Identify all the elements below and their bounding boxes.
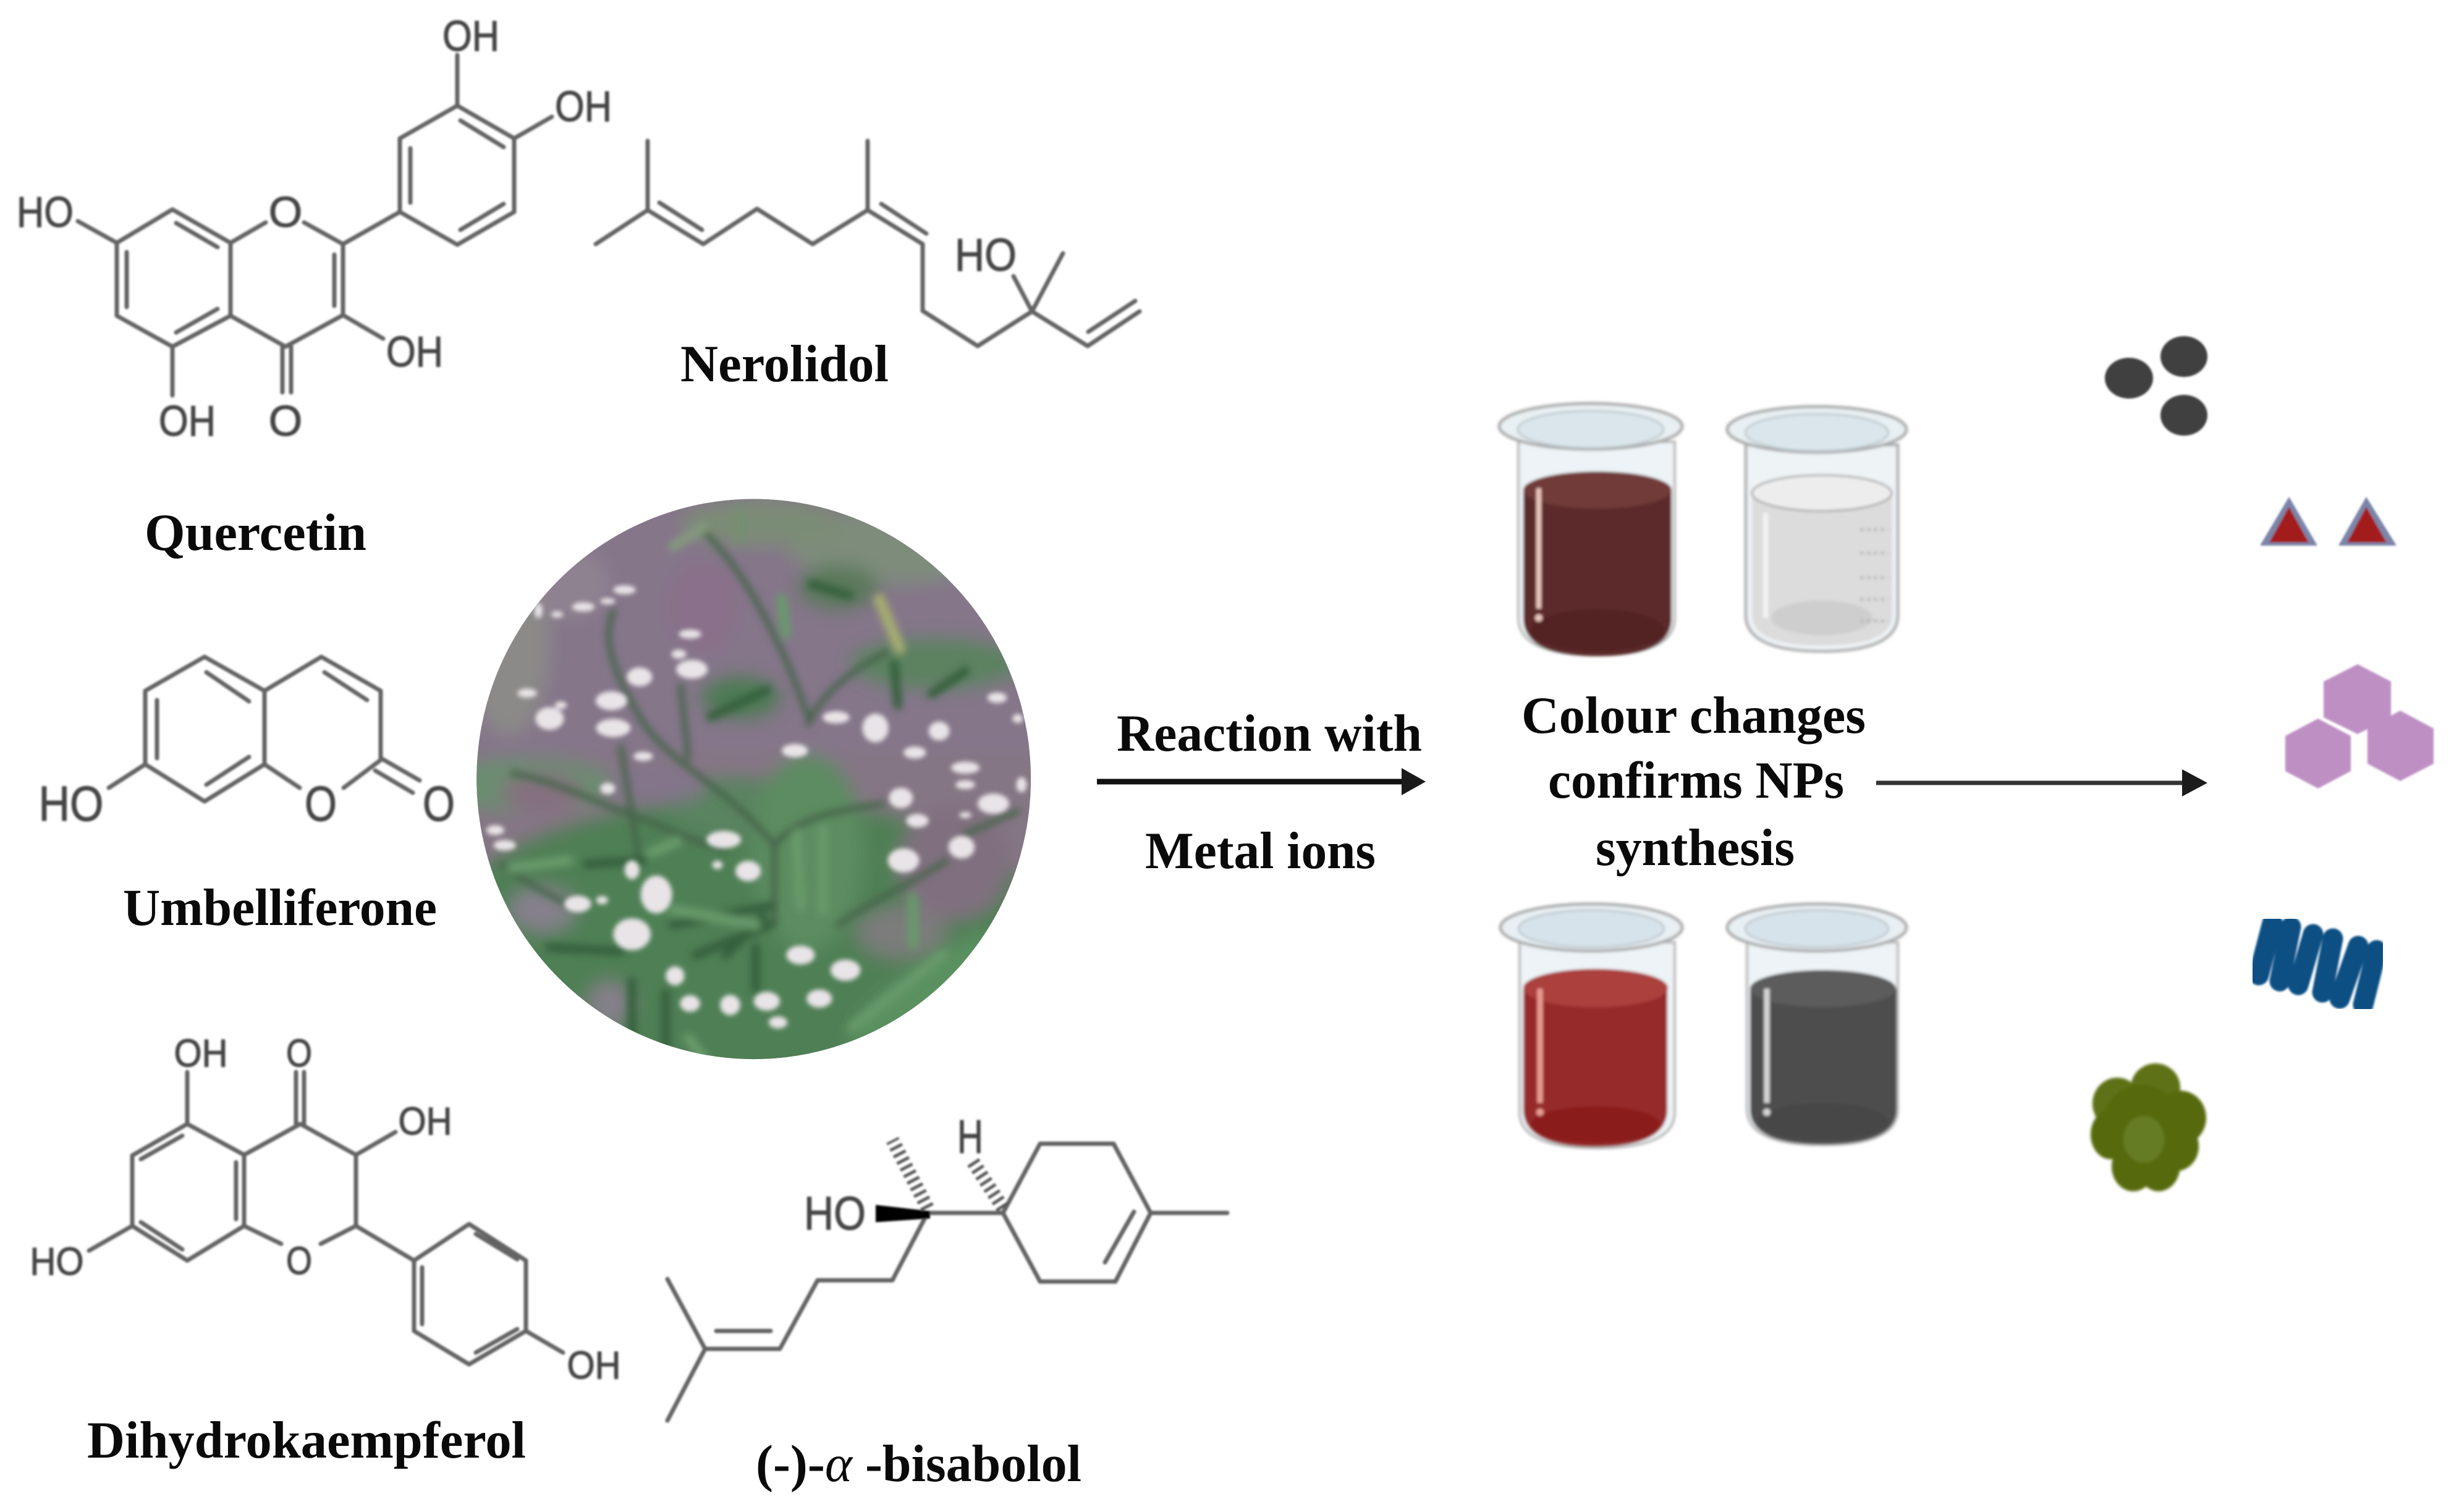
bisabolol atom labels: H — [957, 1111, 983, 1164]
nanoparticles: purple hexagons — [2285, 664, 2434, 788]
beaker: red liquid — [1500, 904, 1682, 1148]
label: alpha-bisabolol: (-)-α -bisabolol — [756, 1435, 1081, 1493]
panel: Dihydrokaempferol structure — [30, 1032, 620, 1387]
nanoparticles: blue rods — [2259, 923, 2377, 1005]
Quercetin bonds — [78, 55, 552, 395]
bisabolol bonds — [667, 1144, 1227, 1421]
Quercetin atom labels: OH — [159, 397, 216, 445]
bisabolol atom labels: HO — [804, 1188, 866, 1240]
label: Colour changes confirms NPs synthesis: synthesis — [1596, 819, 1795, 877]
label: Quercetin: Quercetin — [145, 504, 366, 562]
label: Nerolidol: Nerolidol — [680, 335, 889, 393]
plant stems and leaves — [501, 512, 1018, 1057]
Dihydrokaempferol atom labels: OH — [174, 1032, 227, 1075]
Dihydrokaempferol atom labels: OH — [398, 1100, 452, 1143]
Quercetin atom labels: OH — [386, 327, 443, 376]
arrow: plant to beakers — [1097, 768, 1426, 795]
Nerolidol bonds — [596, 141, 1140, 346]
label: Dihydrokaempferol: Dihydrokaempferol — [87, 1411, 526, 1469]
panel: alpha-bisabolol structure — [667, 1111, 1227, 1421]
Dihydrokaempferol bonds — [89, 1072, 563, 1364]
arrow: beakers to nanoparticles — [1876, 769, 2207, 796]
label: Colour changes confirms NPs synthesis: confirms NPs — [1548, 751, 1844, 809]
bisabolol atom labels — [804, 1111, 983, 1240]
panel: Quercetin structure — [17, 12, 612, 445]
Dihydrokaempferol atom labels — [30, 1032, 620, 1387]
Quercetin atom labels: O — [269, 397, 302, 445]
Dihydrokaempferol atom labels: O — [286, 1032, 312, 1075]
nanoparticles: green cluster — [2091, 1063, 2206, 1191]
photo: flowering plant in circle — [476, 499, 1031, 1059]
beaker: clear liquid — [1727, 407, 1906, 651]
Dihydrokaempferol atom labels: O — [286, 1240, 312, 1283]
Umbelliferone atom labels: O — [423, 776, 455, 831]
beaker: dark grey liquid — [1727, 904, 1906, 1145]
beaker: dark brown liquid — [1499, 403, 1682, 656]
Nerolidol hydroxyl label: HO — [955, 229, 1017, 281]
Quercetin atom labels: OH — [555, 82, 612, 130]
Dihydrokaempferol atom labels: HO — [30, 1240, 84, 1283]
bisabolol hashed wedges — [892, 1140, 1003, 1208]
nanoparticles: red triangles — [2260, 497, 2397, 546]
Umbelliferone atom labels — [38, 776, 455, 831]
Quercetin atom labels: O — [269, 188, 302, 236]
plant background tones — [476, 499, 1030, 1059]
label: Umbelliferone: Umbelliferone — [123, 879, 437, 937]
Umbelliferone bonds — [109, 657, 420, 801]
panel: Nerolidol structure — [596, 141, 1140, 346]
Quercetin atom labels: HO — [17, 188, 74, 236]
label: Colour changes confirms NPs synthesis — [1521, 686, 1866, 877]
label: Metal ions: Metal ions — [1145, 822, 1376, 880]
Quercetin atom labels: OH — [442, 12, 499, 60]
Umbelliferone atom labels: O — [305, 776, 337, 831]
label: Reaction with: Reaction with — [1117, 704, 1422, 762]
Dihydrokaempferol atom labels: OH — [567, 1344, 620, 1387]
Umbelliferone atom labels: HO — [38, 776, 104, 831]
panel: Umbelliferone structure — [38, 657, 455, 831]
bisabolol solid wedge — [876, 1205, 930, 1222]
Quercetin atom labels — [17, 12, 612, 445]
plant white flowers — [486, 585, 1026, 1028]
nanoparticles: dark spheres — [2105, 336, 2207, 436]
label: Colour changes confirms NPs synthesis: Colour changes — [1521, 686, 1866, 745]
